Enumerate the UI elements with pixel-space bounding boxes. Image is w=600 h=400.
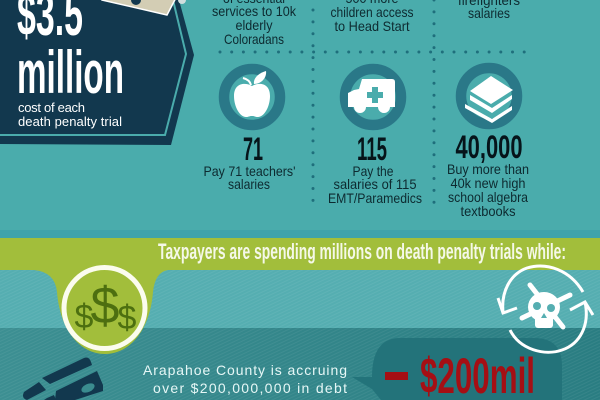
stat: 115: 115 — [357, 131, 387, 167]
text: Arapahoe County: over $200,000,000 in debt — [153, 380, 347, 396]
stat: 115: Pay the — [352, 163, 394, 179]
text: firefighters: salaries — [468, 5, 510, 21]
panel: cost of trial — [0, 0, 194, 145]
stat: minus 200 million — [385, 348, 535, 400]
stat: 40,000: 40,000 — [456, 129, 522, 165]
icon: dollars: $ — [75, 298, 94, 336]
stat: 40,000: school algebra — [448, 189, 528, 205]
caption: cost of each trial — [18, 100, 122, 129]
text: head start: to Head Start — [334, 18, 410, 34]
stat: 40,000 — [447, 129, 529, 219]
icon: books — [461, 68, 517, 124]
text: Arapahoe County: Arapahoe County is accruing — [143, 362, 347, 378]
dotted dividers — [220, 0, 534, 206]
text: elderly services: services to 10k — [212, 3, 297, 19]
icon: ambulance — [345, 69, 401, 125]
lower panel — [0, 230, 600, 400]
stat: 71: salaries — [228, 176, 270, 192]
icon: apple — [224, 69, 280, 125]
stat: 40,000: Buy more than — [447, 161, 529, 177]
text: head start: children access — [330, 4, 414, 20]
icon: skull and cycle arrows — [498, 266, 593, 352]
text: elderly services: Coloradans — [224, 31, 284, 47]
caption: cost of each trial: death penalty trial — [18, 114, 122, 129]
heading: million: million — [17, 39, 124, 106]
stat: 115 — [328, 131, 422, 206]
caption: cost of each trial: cost of each — [18, 100, 85, 115]
text: elderly services: elderly — [236, 17, 272, 33]
icon: credit card — [23, 358, 103, 400]
stat: 115: EMT/Paramedics — [328, 190, 422, 206]
stat: 71: 71 — [243, 131, 263, 167]
text: Arapahoe County — [143, 362, 347, 396]
banner — [0, 238, 600, 354]
text: elderly services — [212, 0, 297, 47]
stat: 71 — [204, 131, 296, 192]
stat: 40,000: 40k new high — [450, 175, 526, 191]
speech bubble — [352, 338, 562, 400]
icon: dollars: $ — [91, 277, 120, 335]
stat: 115: salaries of 115 — [334, 176, 417, 192]
text: head start — [330, 0, 414, 34]
icon: dollars: $ — [118, 299, 137, 337]
stat: 71: Pay 71 teachers' — [204, 163, 296, 179]
stat: 40,000: textbooks — [460, 203, 516, 219]
icon: cash — [102, 0, 186, 15]
text: firefighters — [458, 0, 520, 21]
icon: dollars — [64, 268, 145, 348]
